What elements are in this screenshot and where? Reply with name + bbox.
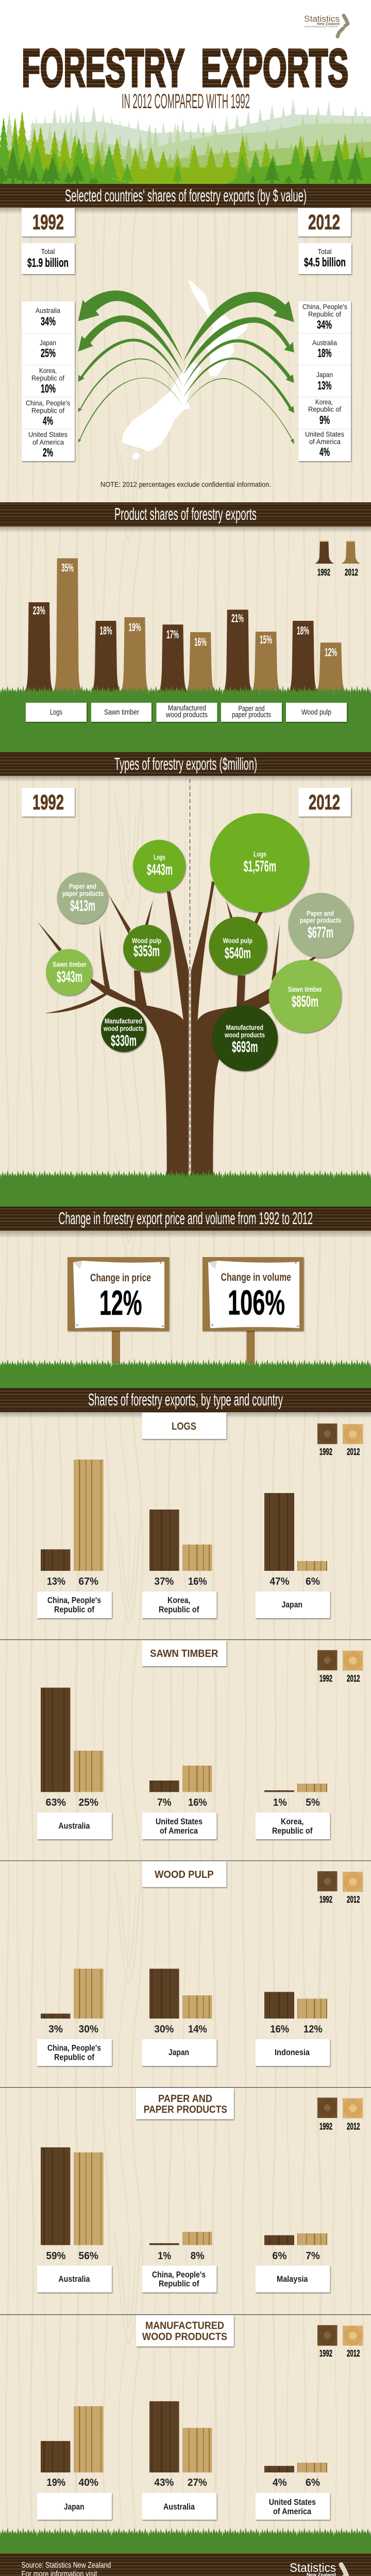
bubble: logs 1992: Logs: [154, 853, 165, 861]
total 1992: $1.9 billion: [27, 256, 69, 270]
values: [46, 2250, 320, 2262]
bubble: manufactured 1992: [101, 1007, 146, 1052]
trunk values: 23%: [33, 604, 45, 617]
bubble: paper 2012: Paper and: [307, 909, 334, 918]
legend: 1992: [319, 2348, 332, 2359]
heading: [142, 1413, 227, 1439]
heading: SAWN TIMBER: [150, 1648, 218, 1659]
legend: [317, 1423, 363, 1457]
legend: [317, 1650, 363, 1684]
grass ground: [0, 2527, 371, 2554]
1992 country list: 34%: [41, 314, 56, 328]
trunk values: 16%: [194, 635, 207, 648]
column header 1992: 1992: [32, 790, 64, 814]
values: 63%: [46, 1797, 66, 1808]
bubble: sawn timber 1992: [46, 949, 92, 995]
2012 country list: Korea,: [315, 398, 333, 406]
bubble: manufactured 1992: wood products: [103, 1024, 144, 1032]
country labels: of America: [160, 1826, 198, 1836]
bubble: sawn timber 2012: Sawn timber: [288, 985, 322, 993]
1992 country list: Japan: [40, 338, 56, 347]
country labels: [37, 2266, 330, 2293]
heading: PAPER AND: [158, 2093, 212, 2105]
forest illustration: [0, 99, 371, 185]
values: 7%: [306, 2250, 320, 2262]
values: 30%: [154, 2024, 174, 2035]
logo: Statistics New Zealand: Statistics: [304, 14, 340, 24]
values: 12%: [303, 2024, 323, 2035]
heading: WOOD PULP: [155, 1869, 214, 1880]
1992 country list: China, People's: [26, 399, 70, 407]
legend: [317, 1871, 363, 1905]
values: 3%: [48, 2024, 63, 2035]
1992 country list: of America: [32, 438, 64, 446]
sign: price: 12%: [99, 1283, 142, 1323]
title: FORESTRY: [22, 39, 184, 98]
bubble: wood pulp 2012: [209, 917, 267, 975]
bubble: manufactured 1992: Manufactured: [105, 1017, 142, 1025]
header: [22, 14, 348, 113]
country labels: Republic of: [54, 1604, 94, 1614]
footer: [0, 2553, 371, 2576]
values: 25%: [78, 1797, 98, 1808]
bubble: logs 2012: [210, 813, 309, 912]
sign: price: [68, 1257, 169, 1364]
bubble: paper 2012: $677m: [308, 923, 333, 941]
values: 40%: [78, 2477, 98, 2488]
legend: stumps: [315, 540, 361, 578]
country labels: Japan: [281, 1600, 302, 1609]
column header 1992: [22, 208, 75, 236]
heading: [136, 2088, 234, 2120]
bubble: logs 2012: Logs: [254, 850, 266, 858]
1992 country list: Republic of: [31, 406, 64, 414]
bubble: wood pulp 1992: [123, 925, 171, 972]
values: 47%: [270, 1576, 290, 1587]
product labels: wood products: [165, 710, 208, 719]
country labels: Indonesia: [275, 2047, 310, 2057]
country labels: Australia: [58, 1821, 90, 1831]
country labels: China, People's: [47, 1596, 101, 1605]
source text: [21, 2561, 149, 2576]
values: 13%: [47, 1576, 65, 1587]
country labels: [37, 1591, 330, 1618]
trunk values: 15%: [260, 633, 272, 646]
bubble: logs 1992: $443m: [147, 860, 173, 878]
column header 2012: [298, 788, 351, 817]
values: 6%: [272, 2250, 287, 2262]
column header 2012: 2012: [309, 790, 340, 814]
legend: 2012: [347, 1894, 360, 1905]
values: 16%: [188, 1797, 207, 1808]
country labels: Australia: [58, 2274, 90, 2284]
2012 country list: Japan: [316, 370, 333, 379]
export arrows 1992: [78, 291, 183, 443]
panel: types of exports tree: [0, 779, 371, 1207]
panel: sawn timber: [37, 1640, 363, 1839]
heading: [142, 1640, 227, 1666]
logo: Statistics New Zealand: TATAURANGA AOTEAROA: [304, 25, 338, 28]
grass ground: [0, 1359, 371, 1388]
2012 country list: Republic of: [308, 310, 341, 318]
total 2012: Total: [317, 247, 332, 256]
bubble: manufactured 2012: [212, 1005, 278, 1071]
panel: wood pulp: [37, 1861, 363, 2066]
band: types of exports heading: Types of forestry exports ($million): [114, 754, 257, 773]
bubble: paper 1992: paper products: [62, 889, 104, 897]
legend: [317, 2325, 363, 2359]
source text: Source: Statistics New Zealand: [22, 2561, 111, 2570]
values: 59%: [46, 2250, 66, 2262]
bubble: paper 1992: [57, 873, 108, 923]
country labels: Republic of: [159, 1604, 199, 1614]
country labels: Republic of: [159, 2279, 199, 2289]
legend: 2012: [347, 2348, 360, 2359]
2012 country list: 4%: [319, 445, 330, 459]
heading: PAPER PRODUCTS: [144, 2104, 227, 2115]
note: NOTE: 2012 percentages exclude confidential information.: [100, 480, 271, 488]
1992 country list: [22, 301, 75, 461]
product labels: paper products: [232, 710, 271, 719]
band: selected countries heading: [0, 184, 371, 208]
country labels: United States: [269, 2497, 316, 2507]
product labels: Paper and: [238, 704, 265, 713]
2012 country list: Australia: [312, 338, 337, 347]
1992 country list: Australia: [36, 306, 60, 314]
country labels: United States: [156, 1817, 203, 1826]
country labels: China, People's: [152, 2270, 206, 2279]
values: 4%: [273, 2477, 287, 2488]
legend: 1992: [319, 2122, 332, 2132]
column header 2012: [298, 208, 351, 236]
values: 67%: [78, 1576, 98, 1587]
values: 19%: [46, 2477, 65, 2488]
column header 1992: 1992: [32, 210, 64, 234]
1992 country list: 4%: [43, 414, 53, 428]
tree trunk and branches: [37, 881, 317, 1178]
values: 14%: [188, 2024, 207, 2035]
grass ground: [0, 1170, 371, 1207]
heading: LOGS: [172, 1421, 196, 1432]
panel: product shares tree-trunk chart: [0, 540, 371, 752]
values: 27%: [188, 2477, 207, 2488]
band: product shares heading: [0, 502, 371, 527]
trunk values: [33, 561, 337, 658]
product labels: Wood pulp: [301, 708, 331, 717]
bubble: logs 1992: [133, 840, 185, 892]
bubble: sawn timber 1992: $343m: [57, 968, 82, 986]
values: 30%: [78, 2024, 98, 2035]
bubble: paper 1992: Paper and: [69, 882, 96, 890]
values: 16%: [270, 2024, 289, 2035]
2012 country list: 18%: [317, 346, 332, 360]
country labels: [37, 2493, 330, 2520]
legend: stumps: 1992: [317, 567, 330, 578]
bubble: wood pulp 2012: Wood pulp: [223, 937, 252, 945]
country labels: Japan: [168, 2047, 189, 2057]
2012 country list: 13%: [317, 379, 332, 392]
trunk values: 35%: [61, 561, 74, 574]
bars: [41, 2147, 327, 2245]
bubble: sawn timber 2012: [269, 960, 341, 1032]
total 2012: $4.5 billion: [304, 256, 346, 269]
values: 8%: [191, 2250, 205, 2262]
country labels: Korea,: [281, 1817, 304, 1826]
bubble: wood pulp 2012: $540m: [225, 944, 251, 962]
1992 country list: 10%: [41, 382, 56, 395]
sign: price: Change in price: [90, 1272, 151, 1284]
legend: [317, 2098, 363, 2132]
trunk values: 18%: [100, 624, 112, 637]
1992 country list: Korea,: [39, 366, 57, 375]
country labels: Republic of: [272, 1826, 313, 1836]
country labels: Republic of: [54, 2052, 94, 2062]
sign: volume: Change in volume: [221, 1272, 291, 1283]
panel: logs: [37, 1413, 363, 1618]
trunk values: 21%: [231, 612, 244, 625]
logo: Statistics New Zealand: [304, 14, 348, 37]
country labels: Australia: [163, 2502, 195, 2512]
total 1992: Total: [41, 247, 55, 256]
bars: [41, 1969, 327, 2019]
trunk values: 18%: [297, 624, 309, 637]
product labels: Sawn timber: [104, 708, 139, 717]
values: 56%: [78, 2250, 98, 2262]
legend: 2012: [347, 1447, 360, 1457]
product labels: Manufactured: [168, 704, 206, 713]
column header 1992: [22, 788, 75, 817]
legend: 2012: [347, 2122, 360, 2132]
trunks: [24, 558, 346, 693]
1992 country list: Republic of: [31, 374, 64, 382]
trunk values: 17%: [166, 628, 179, 641]
values: 5%: [306, 1797, 320, 1808]
heading: [142, 1861, 227, 1887]
total 2012: [298, 243, 351, 274]
values: 1%: [158, 2250, 171, 2262]
band: change in price and volume heading: [0, 1207, 371, 1231]
total 1992: [22, 243, 75, 274]
2012 country list: United States: [305, 430, 344, 438]
1992 country list: 2%: [43, 446, 53, 459]
dashed divider: [190, 779, 191, 1177]
values: [46, 1797, 320, 1808]
country labels: Japan: [64, 2502, 85, 2512]
legend: 1992: [319, 1447, 332, 1457]
product labels: [26, 703, 347, 722]
bubble: manufactured 2012: wood products: [224, 1030, 265, 1039]
legend: 2012: [347, 1673, 360, 1684]
country labels: [37, 2039, 330, 2066]
bubble: wood pulp 1992: Wood pulp: [132, 937, 161, 945]
panel: change signs: [0, 1257, 371, 1388]
product labels: Logs: [50, 708, 62, 717]
logo: Statistics New Zealand white: Statistics: [290, 2561, 336, 2575]
2012 country list: Republic of: [308, 405, 341, 413]
bubble: manufactured 1992: $330m: [111, 1031, 137, 1049]
heading: WOOD PRODUCTS: [142, 2331, 227, 2343]
sign: volume: [203, 1257, 303, 1364]
trunk values: 19%: [129, 621, 141, 634]
legend: stumps: 2012: [345, 567, 358, 578]
values: 37%: [154, 1576, 174, 1587]
values: [48, 2024, 323, 2035]
band: shares by type and country heading: [0, 1388, 371, 1412]
values: 6%: [306, 2477, 320, 2488]
map of New Zealand: [122, 280, 249, 460]
country labels: of America: [273, 2506, 311, 2516]
band: product shares heading: Product shares of forestry exports: [114, 504, 257, 523]
2012 country list: China, People's: [302, 302, 347, 311]
grass ground: [0, 685, 371, 752]
bubble: sawn timber 2012: $850m: [292, 992, 318, 1010]
bubble: wood pulp 1992: $353m: [133, 942, 160, 960]
values: 43%: [154, 2477, 174, 2488]
values: [46, 2477, 320, 2488]
country labels: Malaysia: [277, 2274, 308, 2284]
1992 country list: 25%: [41, 346, 56, 360]
values: 7%: [157, 1797, 172, 1808]
values: [47, 1576, 320, 1587]
bubble: sawn timber 1992: Sawn timber: [53, 960, 87, 969]
2012 country list: of America: [309, 437, 341, 446]
bubble: logs 2012: $1,576m: [243, 857, 276, 875]
logo: Statistics New Zealand: New Zealand: [317, 23, 340, 26]
country labels: [37, 1812, 330, 1839]
panel: paper and paper products: [37, 2088, 363, 2293]
2012 country list: [298, 301, 351, 461]
bars: [41, 2401, 327, 2472]
values: 1%: [273, 1797, 287, 1808]
bubble: manufactured 2012: $693m: [232, 1038, 258, 1056]
band: types of exports heading: [0, 752, 371, 776]
trunk values: 12%: [325, 646, 337, 658]
country labels: Korea,: [167, 1596, 191, 1605]
bars: [41, 1688, 327, 1792]
bubble: paper 2012: [289, 893, 353, 958]
bars: [41, 1460, 327, 1571]
heading: [136, 2315, 234, 2346]
2012 country list: 9%: [319, 413, 330, 427]
bubble: manufactured 2012: Manufactured: [226, 1023, 263, 1031]
heading: MANUFACTURED: [145, 2320, 224, 2332]
panel: manufactured wood products: [37, 2315, 363, 2520]
page background white: [0, 0, 371, 258]
legend: 1992: [319, 1894, 332, 1905]
bubble: paper 1992: $413m: [70, 896, 95, 914]
1992 country list: United States: [28, 430, 68, 438]
export arrows 2012: [183, 292, 294, 444]
values: 6%: [306, 1576, 320, 1587]
values: 16%: [188, 1576, 207, 1587]
2012 country list: 34%: [317, 318, 332, 331]
panel: selected countries: [22, 208, 351, 488]
country labels: China, People's: [47, 2043, 101, 2053]
legend: 1992: [319, 1673, 332, 1684]
sign: volume: 106%: [228, 1283, 285, 1323]
bubble: paper 2012: paper products: [300, 916, 341, 924]
column header 2012: 2012: [308, 210, 340, 234]
